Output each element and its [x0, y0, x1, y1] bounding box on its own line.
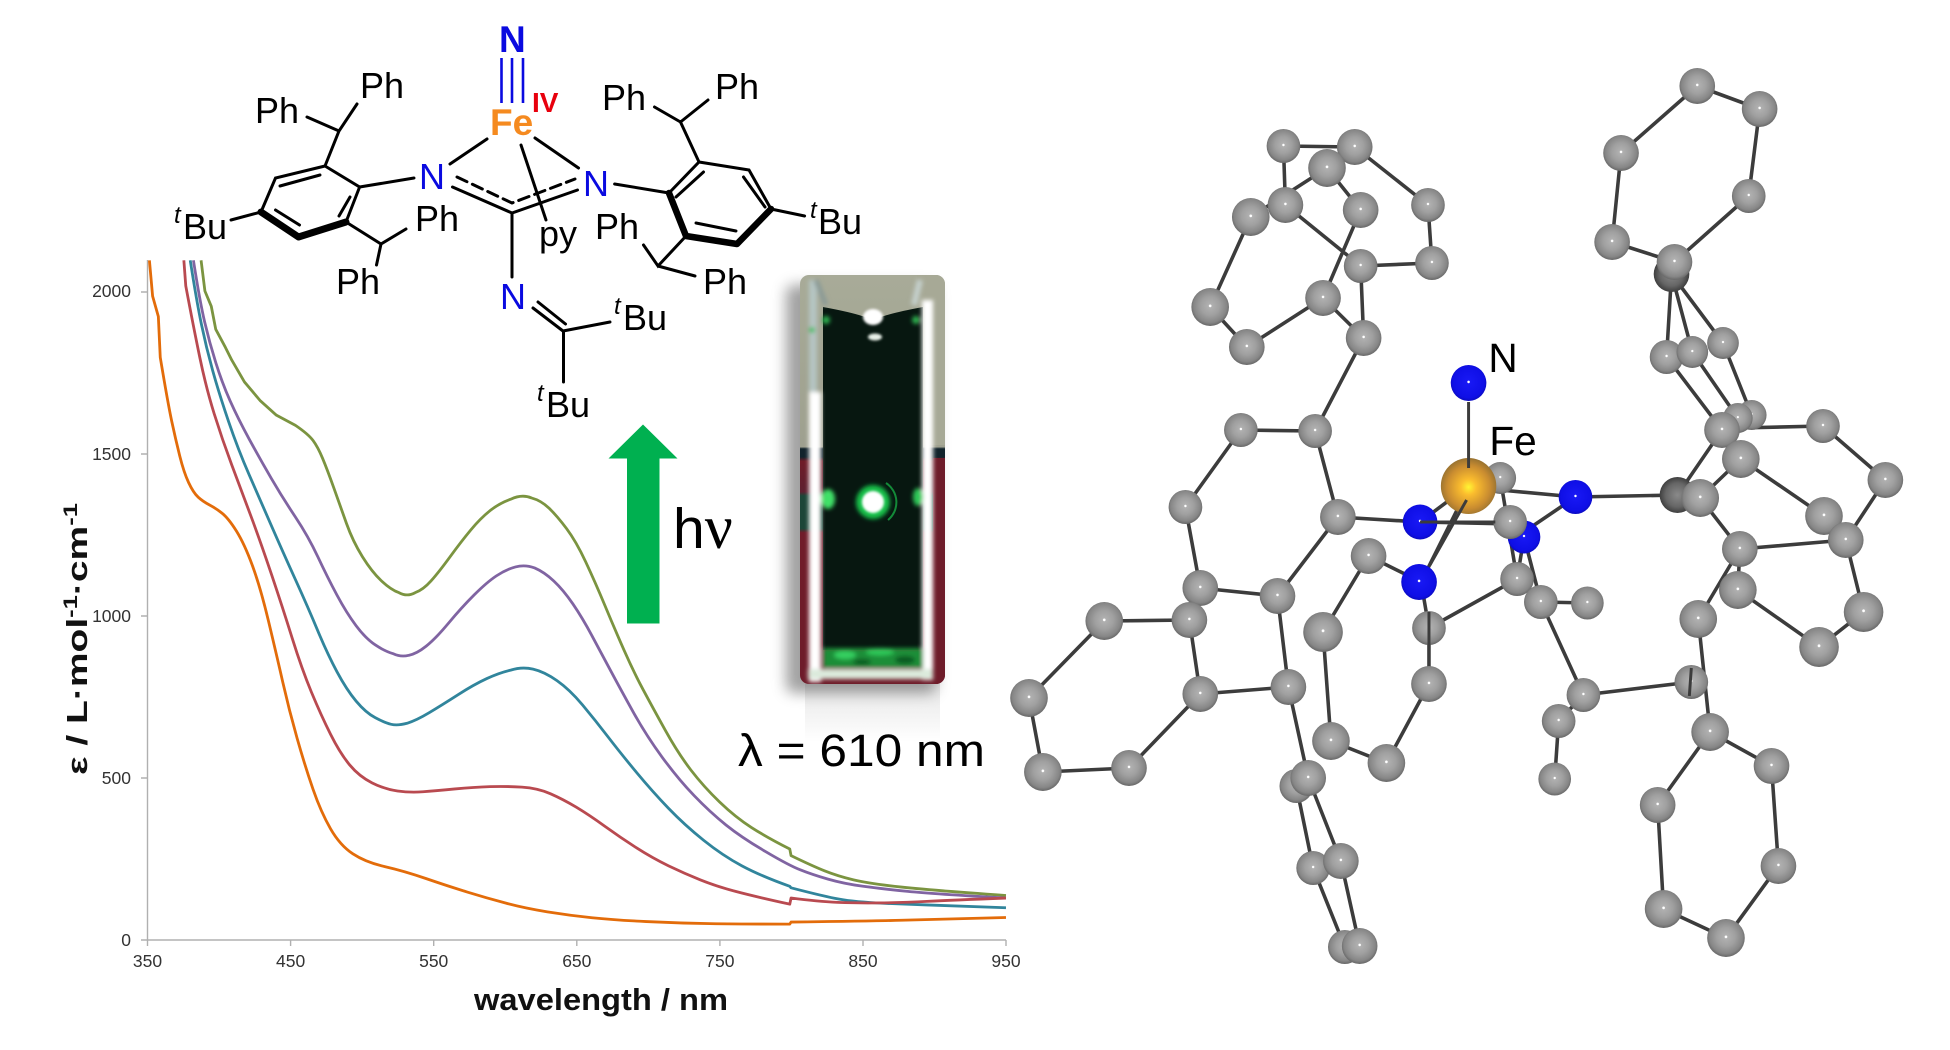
cuvette body	[800, 275, 945, 684]
y axis title: -1	[61, 502, 82, 526]
structure labels: Ph	[703, 261, 747, 302]
y axis title: ε / L·mol	[62, 658, 94, 775]
y axis title: -1	[61, 595, 82, 618]
carbon atoms	[1010, 68, 1903, 964]
structure labels: t	[174, 202, 182, 229]
chemical structure diagram	[174, 19, 862, 425]
nitrogen labels: N	[419, 156, 445, 197]
nitrogen labels: N	[500, 276, 526, 317]
x axis title: wavelength / nm	[473, 982, 728, 1017]
skeletal bonds	[231, 100, 805, 382]
structure labels: Ph	[602, 77, 646, 118]
curve: teal	[190, 260, 1006, 908]
y axis tick labels: 1000	[92, 606, 131, 626]
chart axes	[141, 260, 1006, 946]
y axis tick labels: 2000	[92, 281, 131, 301]
label: N atom: N	[1488, 335, 1518, 381]
iron atom	[1441, 458, 1496, 514]
crystal bonds	[1029, 86, 1885, 947]
structure labels: Bu	[183, 206, 227, 247]
y axis tick labels: 0	[121, 930, 131, 950]
structure labels: Bu	[818, 201, 862, 242]
nitrogen labels: N	[583, 163, 609, 204]
label: Fe atom: Fe	[1489, 418, 1537, 464]
structure labels: t	[614, 293, 622, 320]
x axis tick labels: 450	[276, 951, 305, 971]
cuvette shadow	[786, 285, 936, 693]
x axis tick labels	[133, 951, 1021, 971]
structure labels: Bu	[546, 384, 590, 425]
chart: UV-vis absorption spectra	[61, 260, 1021, 1017]
x axis tick labels: 350	[133, 951, 162, 971]
y axis tick labels	[92, 281, 131, 950]
curve: red	[184, 260, 1006, 904]
structure labels: t	[810, 197, 818, 224]
spectral curves	[149, 260, 1006, 924]
structure labels: Ph	[336, 261, 380, 302]
curve: purple	[193, 260, 1006, 898]
structure labels: Ph	[415, 198, 459, 239]
structure labels: Ph	[360, 65, 404, 106]
photo: cuvette with green laser	[786, 275, 945, 742]
y axis tick labels: 500	[102, 768, 131, 788]
structure labels: py	[539, 213, 577, 254]
curve: orange	[149, 260, 1006, 924]
front carbon atom	[1493, 505, 1527, 539]
x axis tick labels: 550	[419, 951, 449, 971]
bonds over atoms	[1420, 402, 1691, 696]
crystal structure model	[1010, 68, 1903, 964]
structure labels	[174, 65, 862, 425]
structure labels: Ph	[715, 66, 759, 107]
nitrogen atoms	[1401, 365, 1592, 600]
nitrogen labels: N	[499, 19, 526, 60]
structure labels: t	[537, 380, 545, 407]
x axis tick labels: 650	[562, 951, 592, 971]
arrow: green upward	[608, 424, 678, 624]
x axis tick labels: 950	[991, 951, 1021, 971]
structure labels: Ph	[255, 90, 299, 131]
far atoms	[1654, 256, 1695, 513]
cuvette reflection	[805, 684, 940, 742]
y axis tick labels: 1500	[92, 444, 131, 464]
iron label: Fe	[490, 102, 533, 143]
structure labels: Ph	[595, 206, 639, 247]
structure labels: Bu	[623, 297, 667, 338]
y axis title: ·cm	[62, 526, 94, 595]
oxidation state: IV	[532, 87, 559, 118]
x axis tick labels: 750	[705, 951, 735, 971]
triple bond	[502, 58, 523, 103]
curve: green	[201, 260, 1006, 895]
nitrogen labels	[419, 19, 609, 317]
label: wavelength: λ = 610 nm	[738, 725, 985, 776]
label: h nu: hν	[673, 494, 733, 562]
x axis tick labels: 850	[848, 951, 878, 971]
